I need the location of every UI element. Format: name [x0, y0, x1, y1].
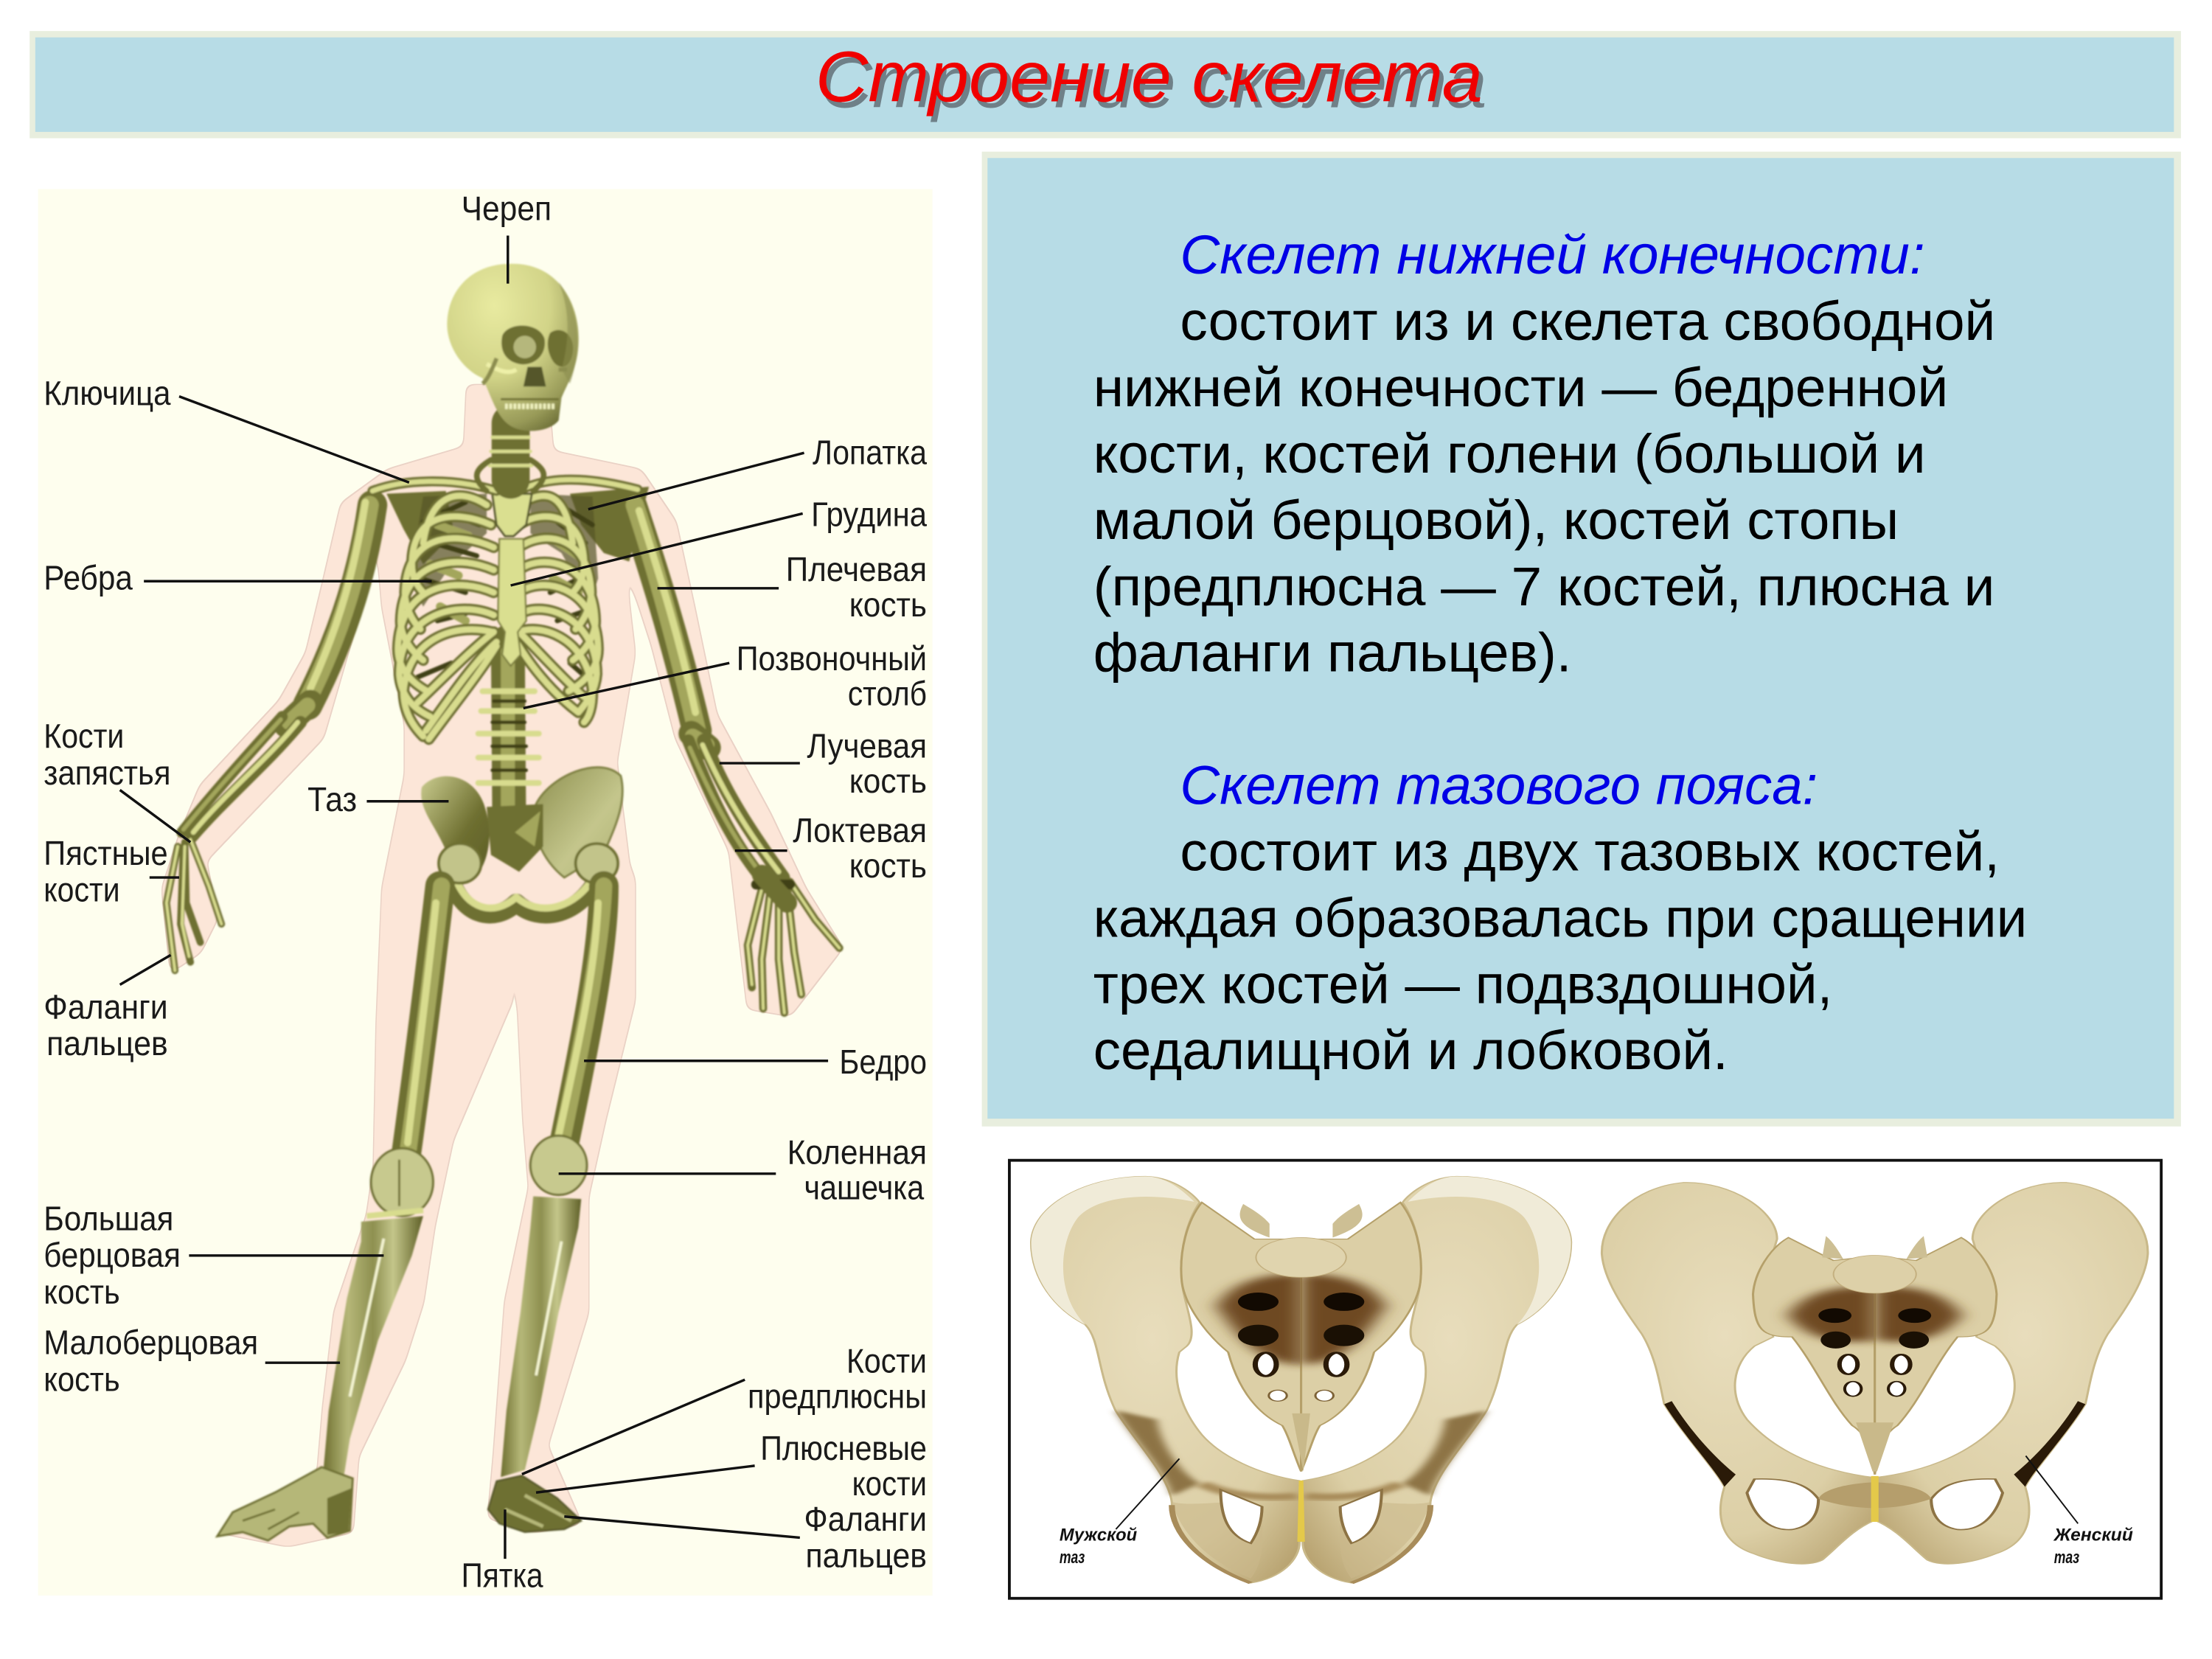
label: Плечевая кость: Плечевая [786, 550, 927, 588]
label: Позвоночный столб: Позвоночный [737, 639, 927, 678]
rib cage dark interior [409, 494, 598, 607]
text block: pelvic girdle [1093, 820, 2027, 1081]
label: Большая берцовая кость: Большая [44, 1199, 173, 1237]
label: Кости запястья: запястья [44, 754, 171, 792]
forearms [192, 723, 301, 837]
label: Малоберцовая кость [44, 1324, 340, 1398]
label: Коленная чашечка: Коленная [787, 1133, 927, 1171]
label: Лучевая кость [720, 726, 927, 800]
label: Грудина [511, 495, 927, 585]
label: Женский таз: Женский [2053, 1525, 2133, 1545]
label: Плюсневые кости: Плюсневые [760, 1429, 927, 1467]
label: Грудина: Грудина [811, 495, 927, 534]
text block: pelvic girdle: трех костей — подвздошной, [1093, 953, 1832, 1015]
text block: pelvic girdle: седалищной и лобковой. [1093, 1019, 1728, 1081]
tibiae and fibulae [323, 1216, 423, 1474]
panel: male and female pelvis comparison [1009, 1161, 2161, 1599]
label: Кости запястья: Кости [44, 717, 124, 755]
label: Малоберцовая кость: кость [44, 1360, 120, 1398]
label: Пятка [462, 1509, 543, 1594]
text block: lower limb: малой берцовой), костей стопы [1093, 489, 1899, 551]
label: Череп [462, 189, 552, 284]
humeri [307, 505, 372, 706]
label: Пястные кости: кости [44, 871, 120, 909]
title banner: Строение скелета [820, 42, 1487, 122]
skull [447, 264, 579, 431]
label: Ключица: Ключица [44, 374, 171, 412]
text block: lower limb: фаланги пальцев). [1093, 622, 1571, 684]
title banner: Строение скелета [815, 37, 1483, 117]
label: Большая берцовая кость [44, 1199, 383, 1311]
text block: lower limb [1093, 290, 1995, 684]
label: Лучевая кость: кость [849, 762, 927, 800]
label: Плюсневые кости: кости [852, 1464, 927, 1503]
illustration: male pelvis [1032, 1177, 1571, 1583]
label: Большая берцовая кость: берцовая [44, 1236, 181, 1274]
label: Лучевая кость: Лучевая [807, 726, 927, 765]
text block: pelvic girdle: каждая образовалась при сращении [1093, 886, 2027, 948]
label: Ребра: Ребра [44, 559, 133, 597]
text block: lower limb: кости, костей голени (большой и [1093, 422, 1926, 484]
label: Мужской таз [1060, 1458, 1179, 1568]
label: Кости запястья [44, 717, 190, 842]
label: Позвоночный столб: столб [848, 675, 927, 713]
spine [508, 642, 509, 832]
femurs [405, 886, 440, 1164]
text block: pelvic girdle: состоит из двух тазовых костей, [1180, 820, 2000, 882]
label: Кости предплюсны: Кости [846, 1342, 927, 1380]
label: Пястные кости [44, 834, 179, 909]
label: Большая берцовая кость: кость [44, 1273, 120, 1311]
clavicles [372, 479, 638, 491]
label: Кости предплюсны: предплюсны [748, 1377, 927, 1415]
panel: text description [982, 152, 2181, 1127]
text block: lower limb: нижней конечности — бедренной [1093, 356, 1948, 418]
label: Череп: Череп [462, 189, 552, 227]
label: Позвоночный столб [524, 639, 927, 713]
text block: lower limb: состоит из и скелета свободной [1180, 290, 1995, 352]
text block: lower limb: (предплюсна — 7 костей, плюсна и [1093, 555, 1994, 617]
scapulae [386, 491, 454, 564]
title banner [29, 31, 2181, 139]
neck [501, 423, 521, 480]
feet [218, 1467, 352, 1540]
label: Фаланги пальцев (стопа): Фаланги [804, 1500, 927, 1538]
label: Коленная чашечка: чашечка [804, 1168, 925, 1206]
skeleton [167, 264, 839, 1540]
label: Фаланги пальцев (стопа) [564, 1500, 927, 1575]
label: Плечевая кость [658, 550, 927, 624]
elbows [286, 703, 310, 725]
panel: skeleton diagram [38, 189, 933, 1596]
label: Малоберцовая кость: Малоберцовая [44, 1324, 258, 1362]
heading: pelvic girdle skeleton: Скелет тазового пояса: [1180, 754, 1818, 816]
heading: lower limb skeleton: Скелет нижней конечности: [1180, 223, 1925, 285]
body silhouette [162, 385, 842, 1546]
pelvis [421, 776, 490, 877]
label: Мужской таз: таз [1060, 1548, 1085, 1568]
illustration: female pelvis [1601, 1183, 2148, 1564]
label: Пястные кости: Пястные [44, 834, 168, 872]
hands [167, 839, 221, 970]
sternum [493, 494, 532, 536]
label: Плюсневые кости [536, 1429, 927, 1503]
ribs back shadow [398, 495, 496, 740]
label: Женский таз [2025, 1455, 2133, 1568]
ribs light [398, 495, 496, 740]
label: Кости предплюсны [522, 1342, 927, 1474]
label: Фаланги пальцев (рука): Фаланги [44, 987, 168, 1026]
label: Локтевая кость: Локтевая [793, 811, 927, 849]
label: Мужской таз: Мужской [1060, 1525, 1137, 1545]
label: Фаланги пальцев (рука): пальцев [46, 1024, 168, 1062]
label: Таз: Таз [307, 780, 357, 818]
label: Ключица [44, 374, 409, 482]
label: Фаланги пальцев (стопа): пальцев [805, 1537, 927, 1575]
label: Лопатка: Лопатка [813, 433, 927, 471]
label: Бедро: Бедро [839, 1043, 927, 1081]
knees [371, 1148, 433, 1216]
label: Плечевая кость: кость [849, 585, 927, 624]
label: Коленная чашечка [559, 1133, 927, 1206]
label: Пятка: Пятка [462, 1556, 543, 1594]
label: Фаланги пальцев (рука) [44, 955, 171, 1062]
label: Локтевая кость [735, 811, 927, 885]
label: Лопатка [588, 433, 927, 509]
label: Локтевая кость: кость [849, 846, 927, 885]
label: Женский таз: таз [2054, 1548, 2079, 1568]
